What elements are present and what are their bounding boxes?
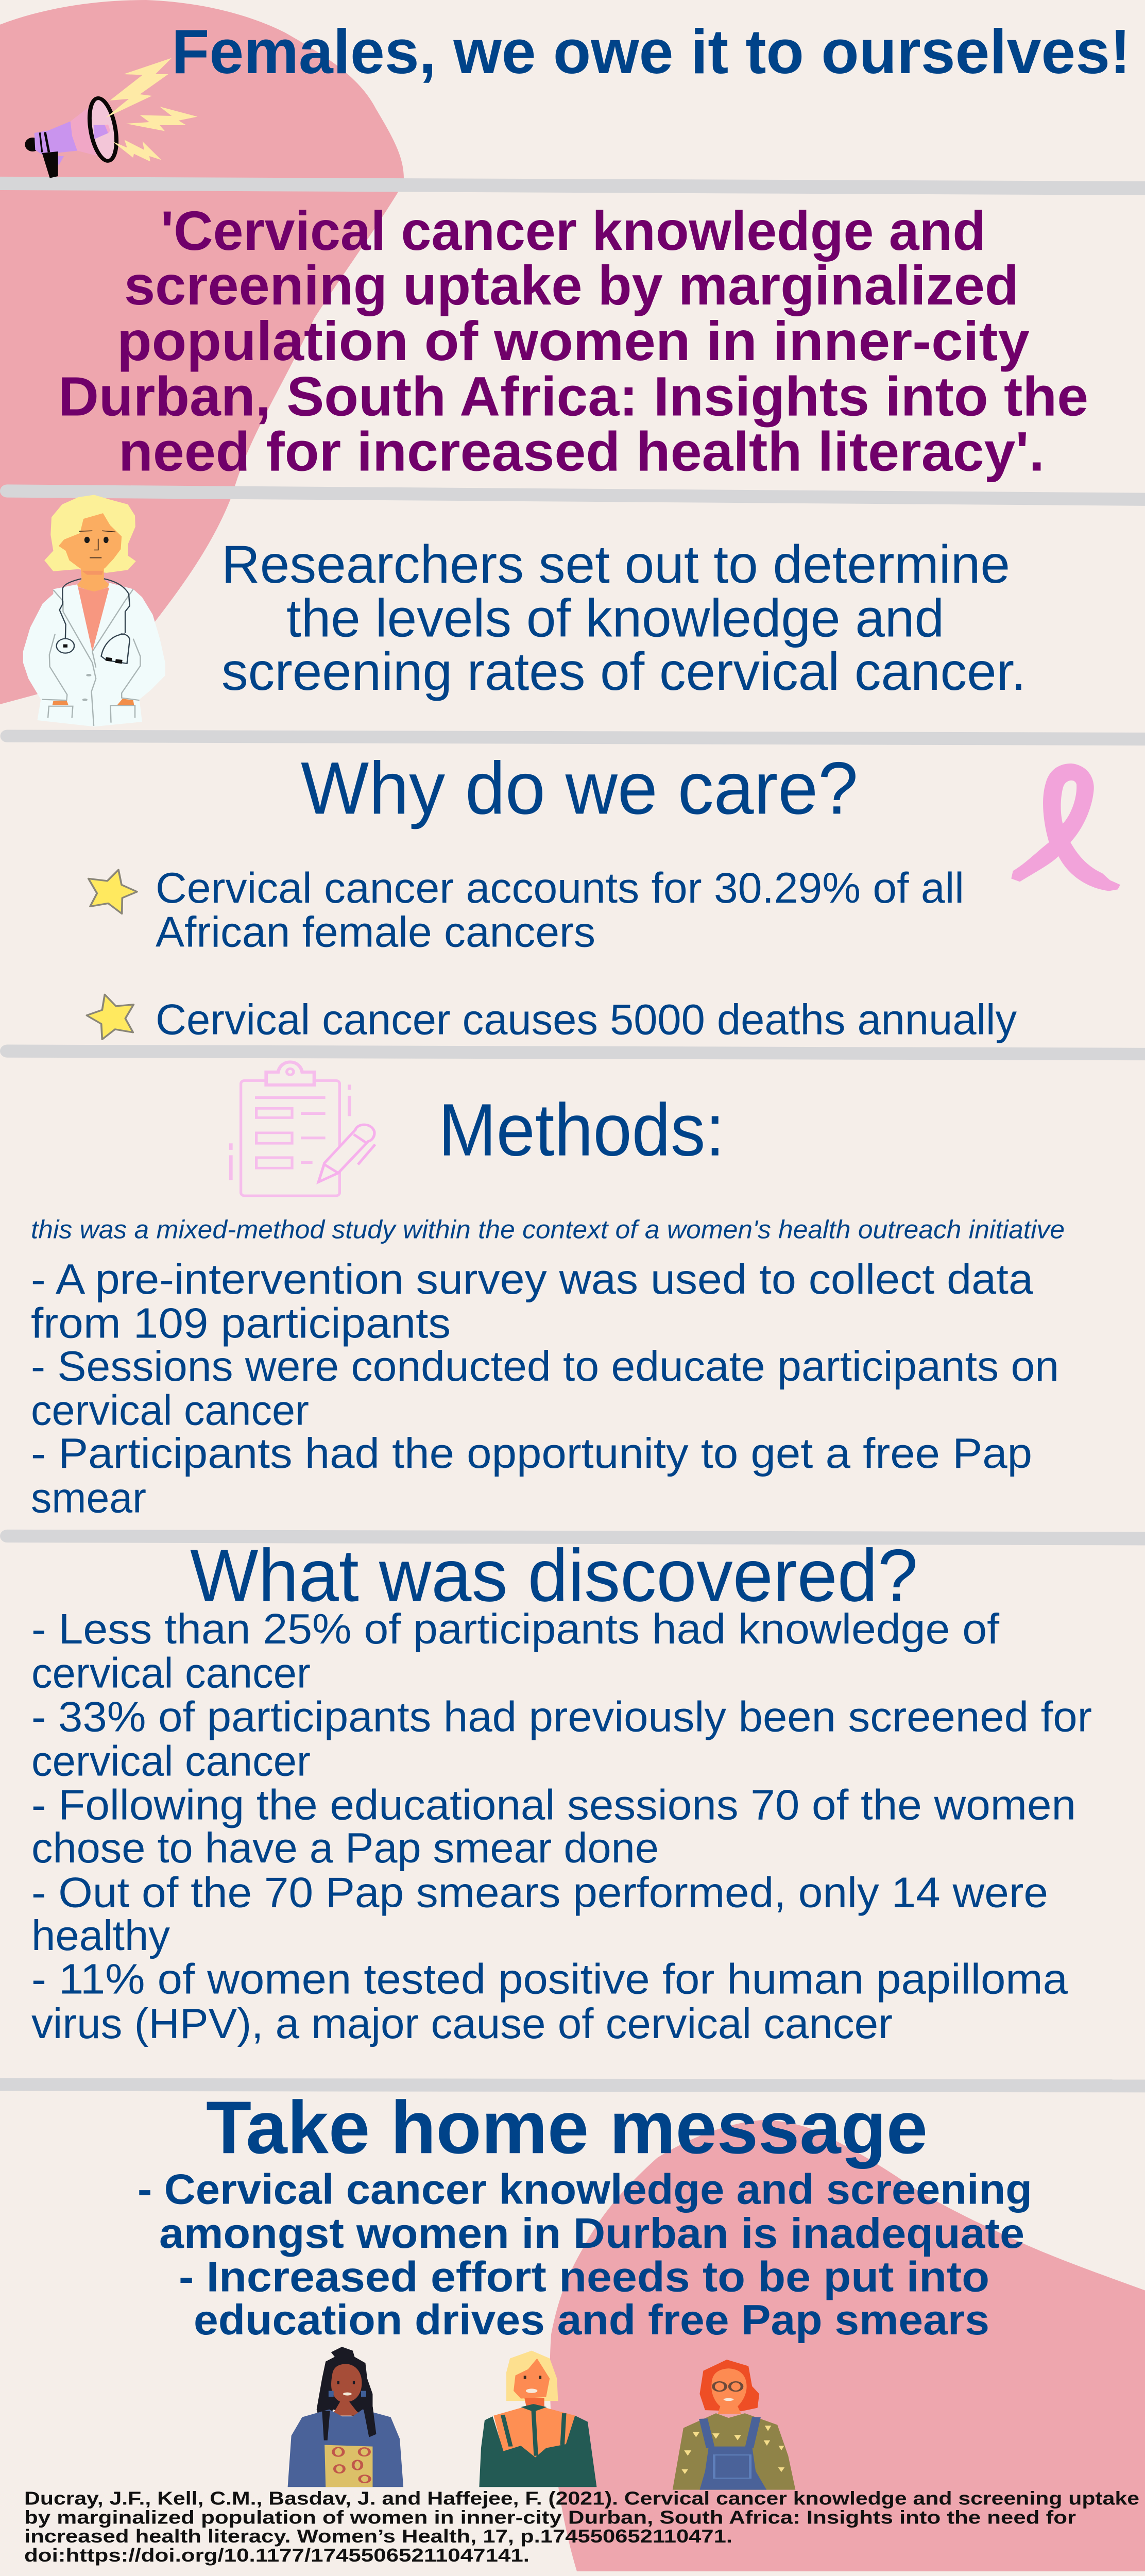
methods list: - Participants had the opportunity to get a free Pap bbox=[31, 1429, 1032, 1477]
citation: increased health literacy. Women’s Health, 17, p.174550652110471. bbox=[24, 2527, 732, 2547]
citation: by marginalized population of women in inner-city Durban, South Africa: Insights into the need for bbox=[24, 2507, 1076, 2528]
take home points bbox=[138, 2165, 1032, 2344]
background blob: top pink shape bbox=[0, 0, 404, 704]
aim statement: Researchers set out to determine bbox=[221, 535, 1010, 595]
icon: stars bbox=[87, 870, 137, 1039]
methods list: smear bbox=[31, 1474, 146, 1522]
study title: screening uptake by marginalized bbox=[124, 255, 1019, 317]
heading: methods: Methods: bbox=[438, 1089, 725, 1172]
aim statement bbox=[221, 535, 1026, 702]
study title: population of women in inner-city bbox=[117, 311, 1030, 372]
illustration: three women bbox=[288, 2347, 795, 2490]
citation: doi:https://doi.org/10.1177/17455065211047141. bbox=[24, 2546, 529, 2566]
why do we care bullet points: African female cancers bbox=[156, 908, 595, 956]
take home points: education drives and free Pap smears bbox=[194, 2296, 989, 2344]
take home points: - Cervical cancer knowledge and screening bbox=[138, 2165, 1032, 2213]
study title: need for increased health literacy'. bbox=[118, 421, 1045, 483]
why do we care bullet points bbox=[156, 863, 1017, 1044]
findings list: cervical cancer bbox=[31, 1649, 311, 1697]
citation bbox=[24, 2488, 1139, 2566]
findings list: - Following the educational sessions 70 of the women bbox=[31, 1781, 1076, 1828]
why do we care bullet points: Cervical cancer accounts for 30.29% of all bbox=[156, 863, 964, 912]
findings list bbox=[31, 1605, 1092, 2047]
icon: megaphone bbox=[25, 58, 197, 178]
findings list: - 33% of participants had previously been screened for bbox=[31, 1693, 1092, 1740]
aim statement: screening rates of cervical cancer. bbox=[221, 641, 1026, 702]
findings list: - Out of the 70 Pap smears performed, only 14 were bbox=[31, 1869, 1048, 1916]
background blob: bottom pink shape bbox=[550, 2120, 1145, 2571]
heading: take home message: Take home message bbox=[206, 2086, 928, 2169]
take home points: amongst women in Durban is inadequate bbox=[159, 2209, 1024, 2257]
woman with blonde hair bbox=[479, 2351, 596, 2487]
icon: doctor illustration bbox=[23, 495, 165, 726]
woman with red hair bbox=[673, 2360, 795, 2490]
methods list: - Sessions were conducted to educate participants on bbox=[31, 1342, 1059, 1390]
findings list: cervical cancer bbox=[31, 1737, 311, 1785]
aim statement: the levels of knowledge and bbox=[286, 588, 944, 648]
icon: clipboard and pencil bbox=[231, 1062, 375, 1196]
citation: Ducray, J.F., Kell, C.M., Basdav, J. and Haffejee, F. (2021). Cervical cancer knowledge and screening uptake bbox=[24, 2488, 1139, 2509]
why do we care bullet points: Cervical cancer causes 5000 deaths annually bbox=[156, 995, 1017, 1044]
findings list: chose to have a Pap smear done bbox=[31, 1824, 659, 1872]
findings list: - 11% of women tested positive for human papilloma bbox=[31, 1955, 1068, 2003]
woman with dark hair bbox=[288, 2347, 403, 2487]
study title bbox=[58, 200, 1088, 483]
methods list: from 109 participants bbox=[31, 1299, 451, 1347]
methods note: this was a mixed-method study within the context of a women's health outreach initiative bbox=[31, 1215, 1065, 1244]
methods list bbox=[31, 1255, 1059, 1522]
findings list: healthy bbox=[31, 1911, 170, 1959]
methods list: cervical cancer bbox=[31, 1386, 309, 1434]
study title: 'Cervical cancer knowledge and bbox=[161, 200, 986, 262]
take home points: - Increased effort needs to be put into bbox=[179, 2253, 989, 2300]
icon: pink ribbon bbox=[1011, 764, 1120, 891]
heading: why do we care: Why do we care? bbox=[301, 747, 858, 830]
heading: what was discovered: What was discovered? bbox=[190, 1534, 918, 1617]
findings list: - Less than 25% of participants had knowledge of bbox=[31, 1605, 1000, 1653]
methods list: - A pre-intervention survey was used to collect data bbox=[31, 1255, 1033, 1303]
findings list: virus (HPV), a major cause of cervical cancer bbox=[31, 1999, 893, 2047]
